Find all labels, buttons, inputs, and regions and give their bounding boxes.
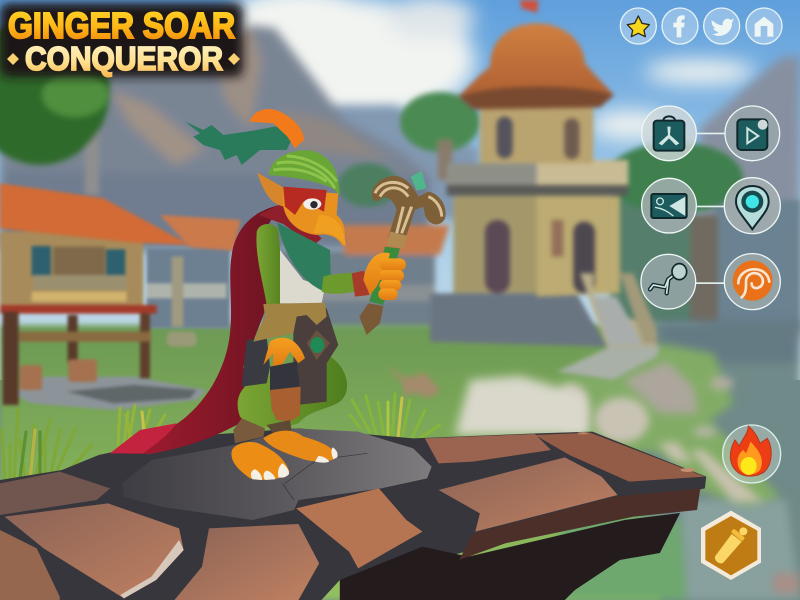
far cliff shade <box>660 320 800 363</box>
orange plume <box>250 109 304 148</box>
hut deck and posts <box>0 305 157 314</box>
left arm <box>256 224 285 305</box>
icon: hexagon pencil badge <box>701 511 761 580</box>
title dark backing <box>0 3 243 77</box>
green scarf <box>277 223 331 292</box>
stone tiles <box>0 472 110 515</box>
title right diamond <box>228 53 240 65</box>
right arm <box>322 273 357 294</box>
icon: twitter <box>704 8 740 44</box>
green hillside <box>560 343 780 507</box>
tower stairs <box>580 273 657 347</box>
icon: facebook <box>662 8 698 44</box>
grey central slab <box>122 428 432 520</box>
title: Ginger Soar Conqueror <box>0 3 243 77</box>
title line two: CONQUEROR <box>25 40 223 77</box>
trees <box>0 15 800 330</box>
lower action buttons <box>701 425 781 580</box>
ornate belt <box>253 303 327 342</box>
side icon grid <box>641 106 780 310</box>
leather skirt <box>293 308 338 405</box>
icon: flame button <box>723 425 781 483</box>
far foot <box>263 431 338 461</box>
cape <box>110 205 280 454</box>
grass tufts <box>2 394 440 480</box>
wooden fascia <box>459 488 700 560</box>
icon: play card <box>725 106 780 161</box>
middle tuft <box>118 405 178 445</box>
tower base <box>430 293 607 347</box>
hut roof <box>0 183 190 245</box>
icon: map pin <box>724 178 780 234</box>
sky <box>0 0 800 380</box>
far pavilion <box>147 248 230 328</box>
icon: running figure <box>641 254 696 309</box>
near foot <box>231 442 289 480</box>
ankle wraps <box>233 418 265 443</box>
head and beak <box>283 190 345 247</box>
icon: star <box>620 8 656 44</box>
gemstone <box>307 330 330 360</box>
tower dome <box>458 23 614 109</box>
icon: envelope map <box>642 178 696 233</box>
pink base <box>773 573 800 593</box>
staff tip <box>359 303 383 335</box>
title left diamond <box>7 53 19 65</box>
torso <box>280 250 325 303</box>
deer <box>385 365 440 398</box>
dark stone base <box>0 428 706 600</box>
lower hand <box>263 338 305 368</box>
ground <box>0 325 660 600</box>
green feather <box>185 122 291 165</box>
wrist bracelet <box>352 271 369 297</box>
hillside rocks <box>555 362 763 502</box>
right side hills and rocks <box>555 320 800 600</box>
stone platform <box>13 377 207 410</box>
green cap <box>269 150 339 195</box>
lower pavilion <box>680 500 800 600</box>
scarf collar <box>258 203 322 246</box>
gripping hand <box>363 253 406 300</box>
tower flag <box>520 0 538 13</box>
tower <box>430 0 660 380</box>
far orange roof <box>260 225 450 328</box>
icon: case with propeller <box>642 106 696 161</box>
tower lower storey <box>453 192 620 293</box>
white rocks in meadow <box>455 376 590 435</box>
barrels <box>20 365 42 390</box>
tower upper storey <box>480 105 593 163</box>
character: goblin hero with staff <box>110 109 446 480</box>
leg <box>238 357 347 428</box>
hut wall <box>0 232 143 305</box>
dark arch underside <box>340 513 680 600</box>
hill base <box>640 320 800 600</box>
connector row two <box>696 206 725 207</box>
lower green <box>560 507 687 600</box>
icon: orange spiral p <box>724 254 780 310</box>
ear <box>257 173 286 207</box>
tower balcony <box>447 163 537 188</box>
rivets <box>578 432 589 435</box>
staff head <box>372 171 446 249</box>
dark glove <box>270 362 301 393</box>
clouds <box>225 0 755 139</box>
rock cliff platform <box>0 428 706 600</box>
hut and pavilion <box>0 183 241 410</box>
top icon row <box>620 8 782 44</box>
left tuft <box>2 410 100 480</box>
icon: home <box>746 8 782 44</box>
staff shaft <box>369 247 400 305</box>
connector row three <box>696 282 725 284</box>
title line one: GINGER SOAR <box>8 5 235 46</box>
right tuft <box>350 394 440 438</box>
stone path <box>557 347 660 380</box>
mountains <box>0 25 800 340</box>
connector row one <box>696 133 725 134</box>
